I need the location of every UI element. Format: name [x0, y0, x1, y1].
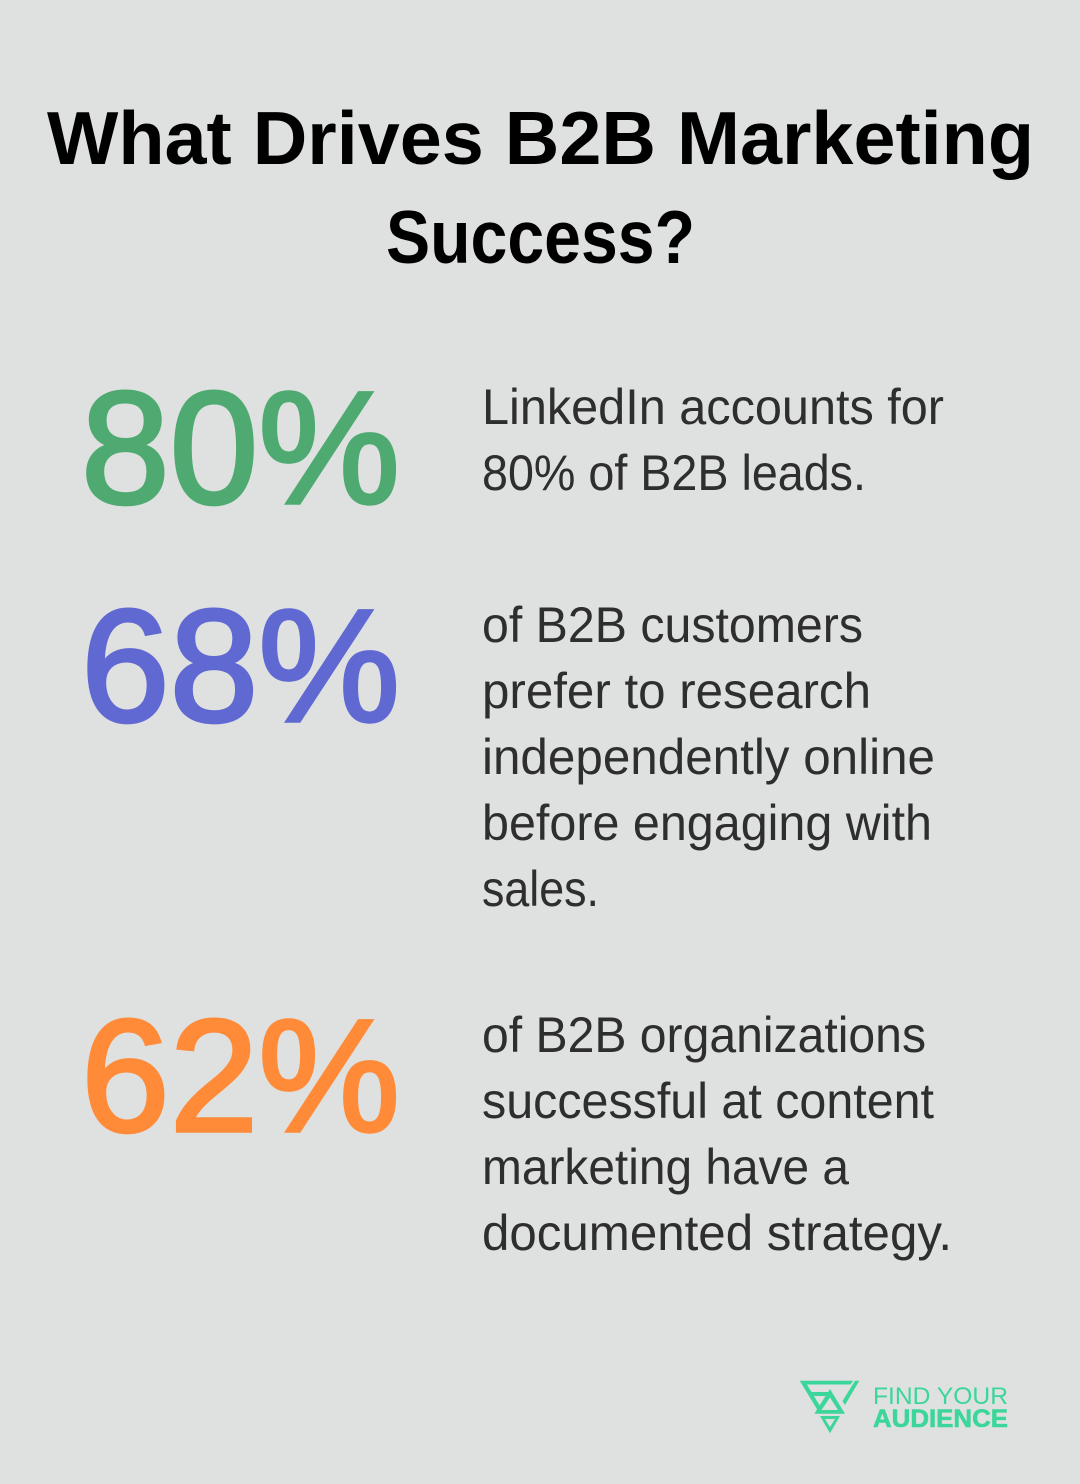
title [47, 96, 1034, 279]
stat description: content strategy [482, 1007, 952, 1261]
stat value: 68%: 68% [81, 576, 400, 755]
stat description: research: independently online [482, 729, 935, 785]
stat description: content strategy: marketing have a [482, 1139, 849, 1195]
logo wordmark [873, 1383, 1008, 1433]
stat description: content strategy: successful at content [482, 1073, 934, 1129]
stat description: research [482, 597, 935, 917]
logo: Find Your Audience [800, 1381, 1008, 1433]
stat description: LinkedIn: 80% of B2B leads. [482, 445, 866, 501]
stat description: research: sales. [482, 861, 599, 917]
stat description: research: of B2B customers [482, 597, 863, 653]
stat value: 62%: 62% [81, 986, 400, 1165]
logo wordmark: FIND YOUR [873, 1383, 1008, 1410]
stat value: 80%: 80% [81, 358, 400, 537]
stat: 62% [81, 986, 952, 1261]
icon: triangle mark [800, 1381, 859, 1433]
stat description: research: prefer to research [482, 663, 871, 719]
stat description: content strategy: documented strategy. [482, 1205, 952, 1261]
stat: 68% [81, 576, 935, 917]
stat description: LinkedIn: LinkedIn accounts for [482, 379, 944, 435]
title: What Drives B2B Marketing [47, 96, 1034, 180]
stat description: research: before engaging with [482, 795, 932, 851]
stat description: LinkedIn [482, 379, 944, 501]
stat: 80% [81, 358, 944, 537]
stat description: content strategy: of B2B organizations [482, 1007, 926, 1063]
logo wordmark: AUDIENCE [873, 1405, 1008, 1433]
title: Success? [386, 195, 695, 279]
